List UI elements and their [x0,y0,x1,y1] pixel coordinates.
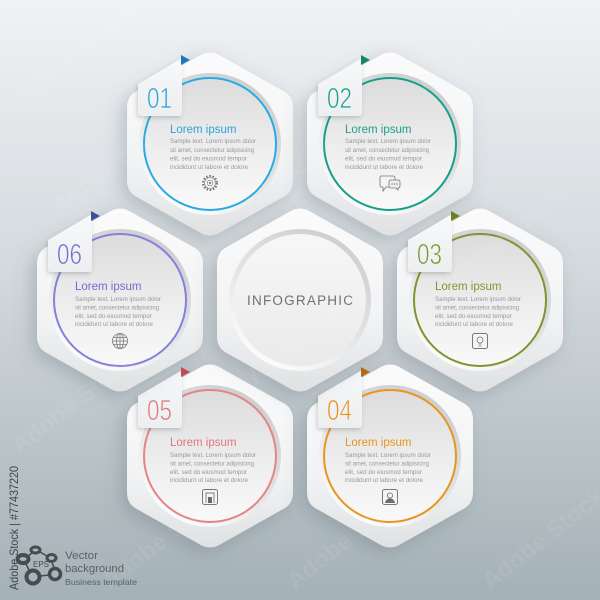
number tag [48,211,100,272]
tag triangle [181,367,190,377]
tag triangle [91,211,100,221]
icon: EPS gears logo [18,547,60,584]
body text: Sample text. Lorem ipsum dolor [345,452,431,459]
watermarks: Adobe Stock [47,108,180,220]
watermarks: Adobe Stock [237,108,370,220]
circle rim [319,73,461,215]
coloured ring [54,234,186,366]
body text: sit amet, consectetur adipisicing [345,460,430,468]
circle rim [49,229,191,371]
coloured ring [144,78,276,210]
watermarks: Adobe Stock [437,183,570,295]
body text: Sample text. Lorem ipsum dolor [345,138,431,145]
watermarks: Adobe Stock [242,278,375,390]
panel: hexagon 01 [127,52,293,236]
body text [345,138,431,171]
body text: Sample text. Lorem ipsum dolor [170,138,256,145]
icon: light bulb [472,334,488,348]
hexagon body [217,208,383,392]
heading: Lorem ipsum [435,281,501,293]
body text: sit amet, consectetur adipisicing [170,460,255,468]
tag card [408,214,452,272]
number: 01 [147,83,172,115]
panel: hexagon 02 [307,52,473,236]
body text [170,138,256,171]
body text: Sample text. Lorem ipsum dolor [435,296,521,303]
body text: sit amet, consectetur adipisicing [345,147,430,154]
number: 02 [327,83,352,115]
body text: Sample text. Lorem ipsum dolor [170,452,256,459]
icon: EPS gears logo: EPS [33,560,49,569]
number tag [408,211,460,272]
icon: globe [112,334,128,348]
number: 04 [327,395,352,427]
hexagon body [397,208,563,392]
body text: sit amet, consectetur adipisicing [170,147,255,154]
circle rim [319,385,461,527]
body text [435,296,521,328]
tag triangle [451,211,460,221]
body text [75,296,161,328]
heading: Lorem ipsum [345,437,411,449]
hexagon body [307,52,473,236]
heading: Lorem ipsum [345,124,411,136]
heading: Lorem ipsum [170,437,236,449]
icon: door figure [202,490,218,504]
heading: Lorem ipsum [75,281,141,293]
circle rim [409,229,551,371]
tag card [138,58,182,116]
stock credit: Adobe Stock | #77437220 [7,466,21,590]
tag card [48,214,92,272]
number tag [318,55,370,116]
body text: elit, sed do eiusmod tempor [170,156,247,162]
body text: elit, sed do eiusmod tempor [345,469,422,476]
hexagon body [37,208,203,392]
body text: incididunt ut labore et dolore [170,477,249,484]
tag triangle [361,55,370,65]
number tag [138,367,190,428]
circle rim [139,73,281,215]
footer caption: Vector [65,550,98,562]
body text: incididunt ut labore et dolore [345,164,424,171]
watermarks: Adobe Stock [282,483,415,595]
title: INFOGRAPHIC [247,293,353,308]
number: 05 [147,395,172,427]
heading: Lorem ipsum [170,124,236,136]
body text: elit, sed do eiusmod tempor [345,156,422,162]
panel: hexagon 03 [397,208,563,392]
footer caption [65,550,137,587]
hexagon body [307,364,473,548]
number tag [138,55,190,116]
watermarks: Adobe Stock [97,483,230,595]
body text: elit, sed do eiusmod tempor [75,313,152,320]
body text: sit amet, consectetur adipisicing [435,304,520,312]
body text: incididunt ut labore et dolore [345,477,424,484]
circle rim [229,229,371,371]
coloured ring [144,390,276,522]
tag triangle [181,55,190,65]
icon: chat bubbles [380,176,400,191]
body text: elit, sed do eiusmod tempor [170,469,247,476]
body text: incididunt ut labore et dolore [75,321,154,328]
body text [345,452,431,484]
tag triangle [361,367,370,377]
body text: elit, sed do eiusmod tempor [435,313,512,320]
number: 06 [57,239,82,271]
tag card [318,58,362,116]
panel: centre hexagon [217,208,383,392]
body text: incididunt ut labore et dolore [435,321,514,328]
coloured ring [324,390,456,522]
coloured ring [324,78,456,210]
number: 03 [417,239,442,271]
icon: gear [203,176,217,190]
number tag [318,367,370,428]
watermarks: Adobe Stock [7,348,140,460]
icon: person portrait [382,490,398,504]
panel: hexagon 04 [307,364,473,548]
body text: incididunt ut labore et dolore [170,164,249,171]
body text [170,452,256,484]
panel: hexagon 06 [37,208,203,392]
hexagon body [127,52,293,236]
circle rim [139,385,281,527]
footer caption: background [65,563,124,575]
body text: Sample text. Lorem ipsum dolor [75,296,161,303]
watermarks: Adobe Stock [9,0,142,110]
hexagon body [127,364,293,548]
coloured ring [414,234,546,366]
footer caption: Business template [65,577,137,587]
tag card [138,370,182,428]
panel: hexagon 05 [127,364,293,548]
body text: sit amet, consectetur adipisicing [75,304,160,312]
centre disc [234,234,366,366]
tag card [318,370,362,428]
